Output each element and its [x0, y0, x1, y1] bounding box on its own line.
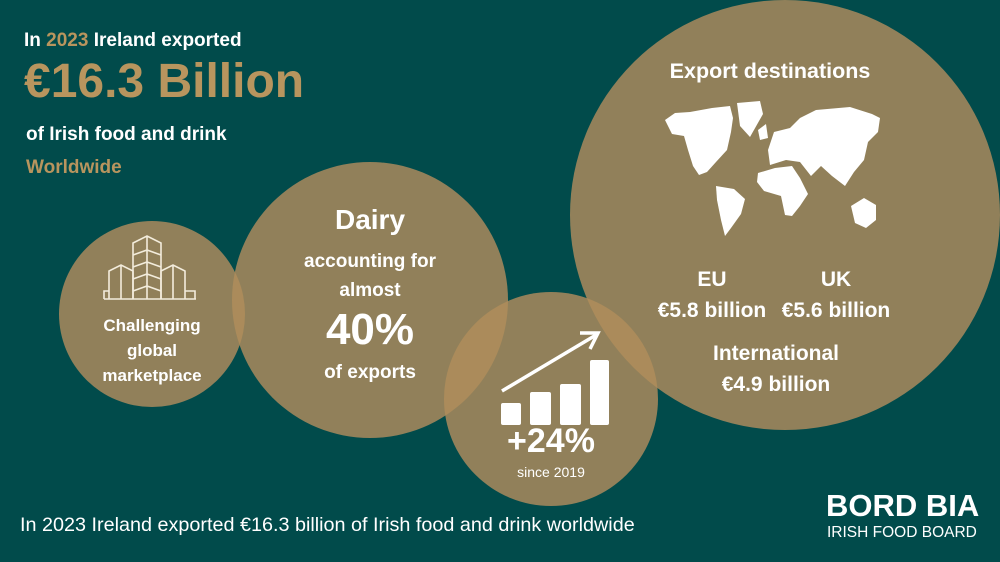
logo	[826, 488, 979, 541]
icon: world map	[665, 101, 880, 236]
text: accounting for	[304, 251, 436, 272]
footer caption: In 2023 Ireland exported €16.3 billion of Irish food and drink worldwide	[20, 514, 635, 536]
panel: challenging marketplace	[102, 235, 202, 385]
UK figure: €5.6 billion	[782, 299, 890, 322]
EU figure: EU	[697, 268, 727, 291]
worldwide: Worldwide	[26, 157, 122, 178]
text: Challenging	[103, 316, 201, 335]
International figure	[713, 342, 839, 396]
EU figure: €5.8 billion	[658, 299, 766, 322]
text: of exports	[324, 362, 416, 383]
UK figure	[782, 268, 890, 322]
intro line: In 2023 Ireland exported	[24, 30, 242, 51]
text: almost	[339, 280, 401, 301]
text	[102, 316, 202, 385]
sub line: of Irish food and drink	[26, 124, 227, 145]
panel: dairy	[304, 204, 436, 383]
caption: since 2019	[517, 464, 585, 480]
text: global	[127, 341, 177, 360]
percentage: 40%	[326, 305, 414, 354]
EU figure	[658, 268, 766, 322]
heading: Export destinations	[670, 59, 870, 83]
panel: export destinations	[658, 59, 890, 396]
logo: IRISH FOOD BOARD	[827, 524, 977, 541]
International figure: International	[713, 342, 839, 365]
UK figure: UK	[821, 268, 851, 291]
text: marketplace	[102, 366, 202, 385]
heading: Dairy	[335, 204, 405, 235]
big figure: €16.3 Billion	[24, 55, 304, 108]
logo: BORD BIA	[826, 488, 979, 523]
icon: buildings	[103, 235, 196, 300]
text	[304, 251, 436, 301]
panel: growth	[501, 331, 609, 480]
percentage: +24%	[507, 422, 595, 460]
icon: growth chart	[501, 331, 609, 425]
International figure: €4.9 billion	[722, 373, 830, 396]
headline block	[24, 30, 304, 178]
